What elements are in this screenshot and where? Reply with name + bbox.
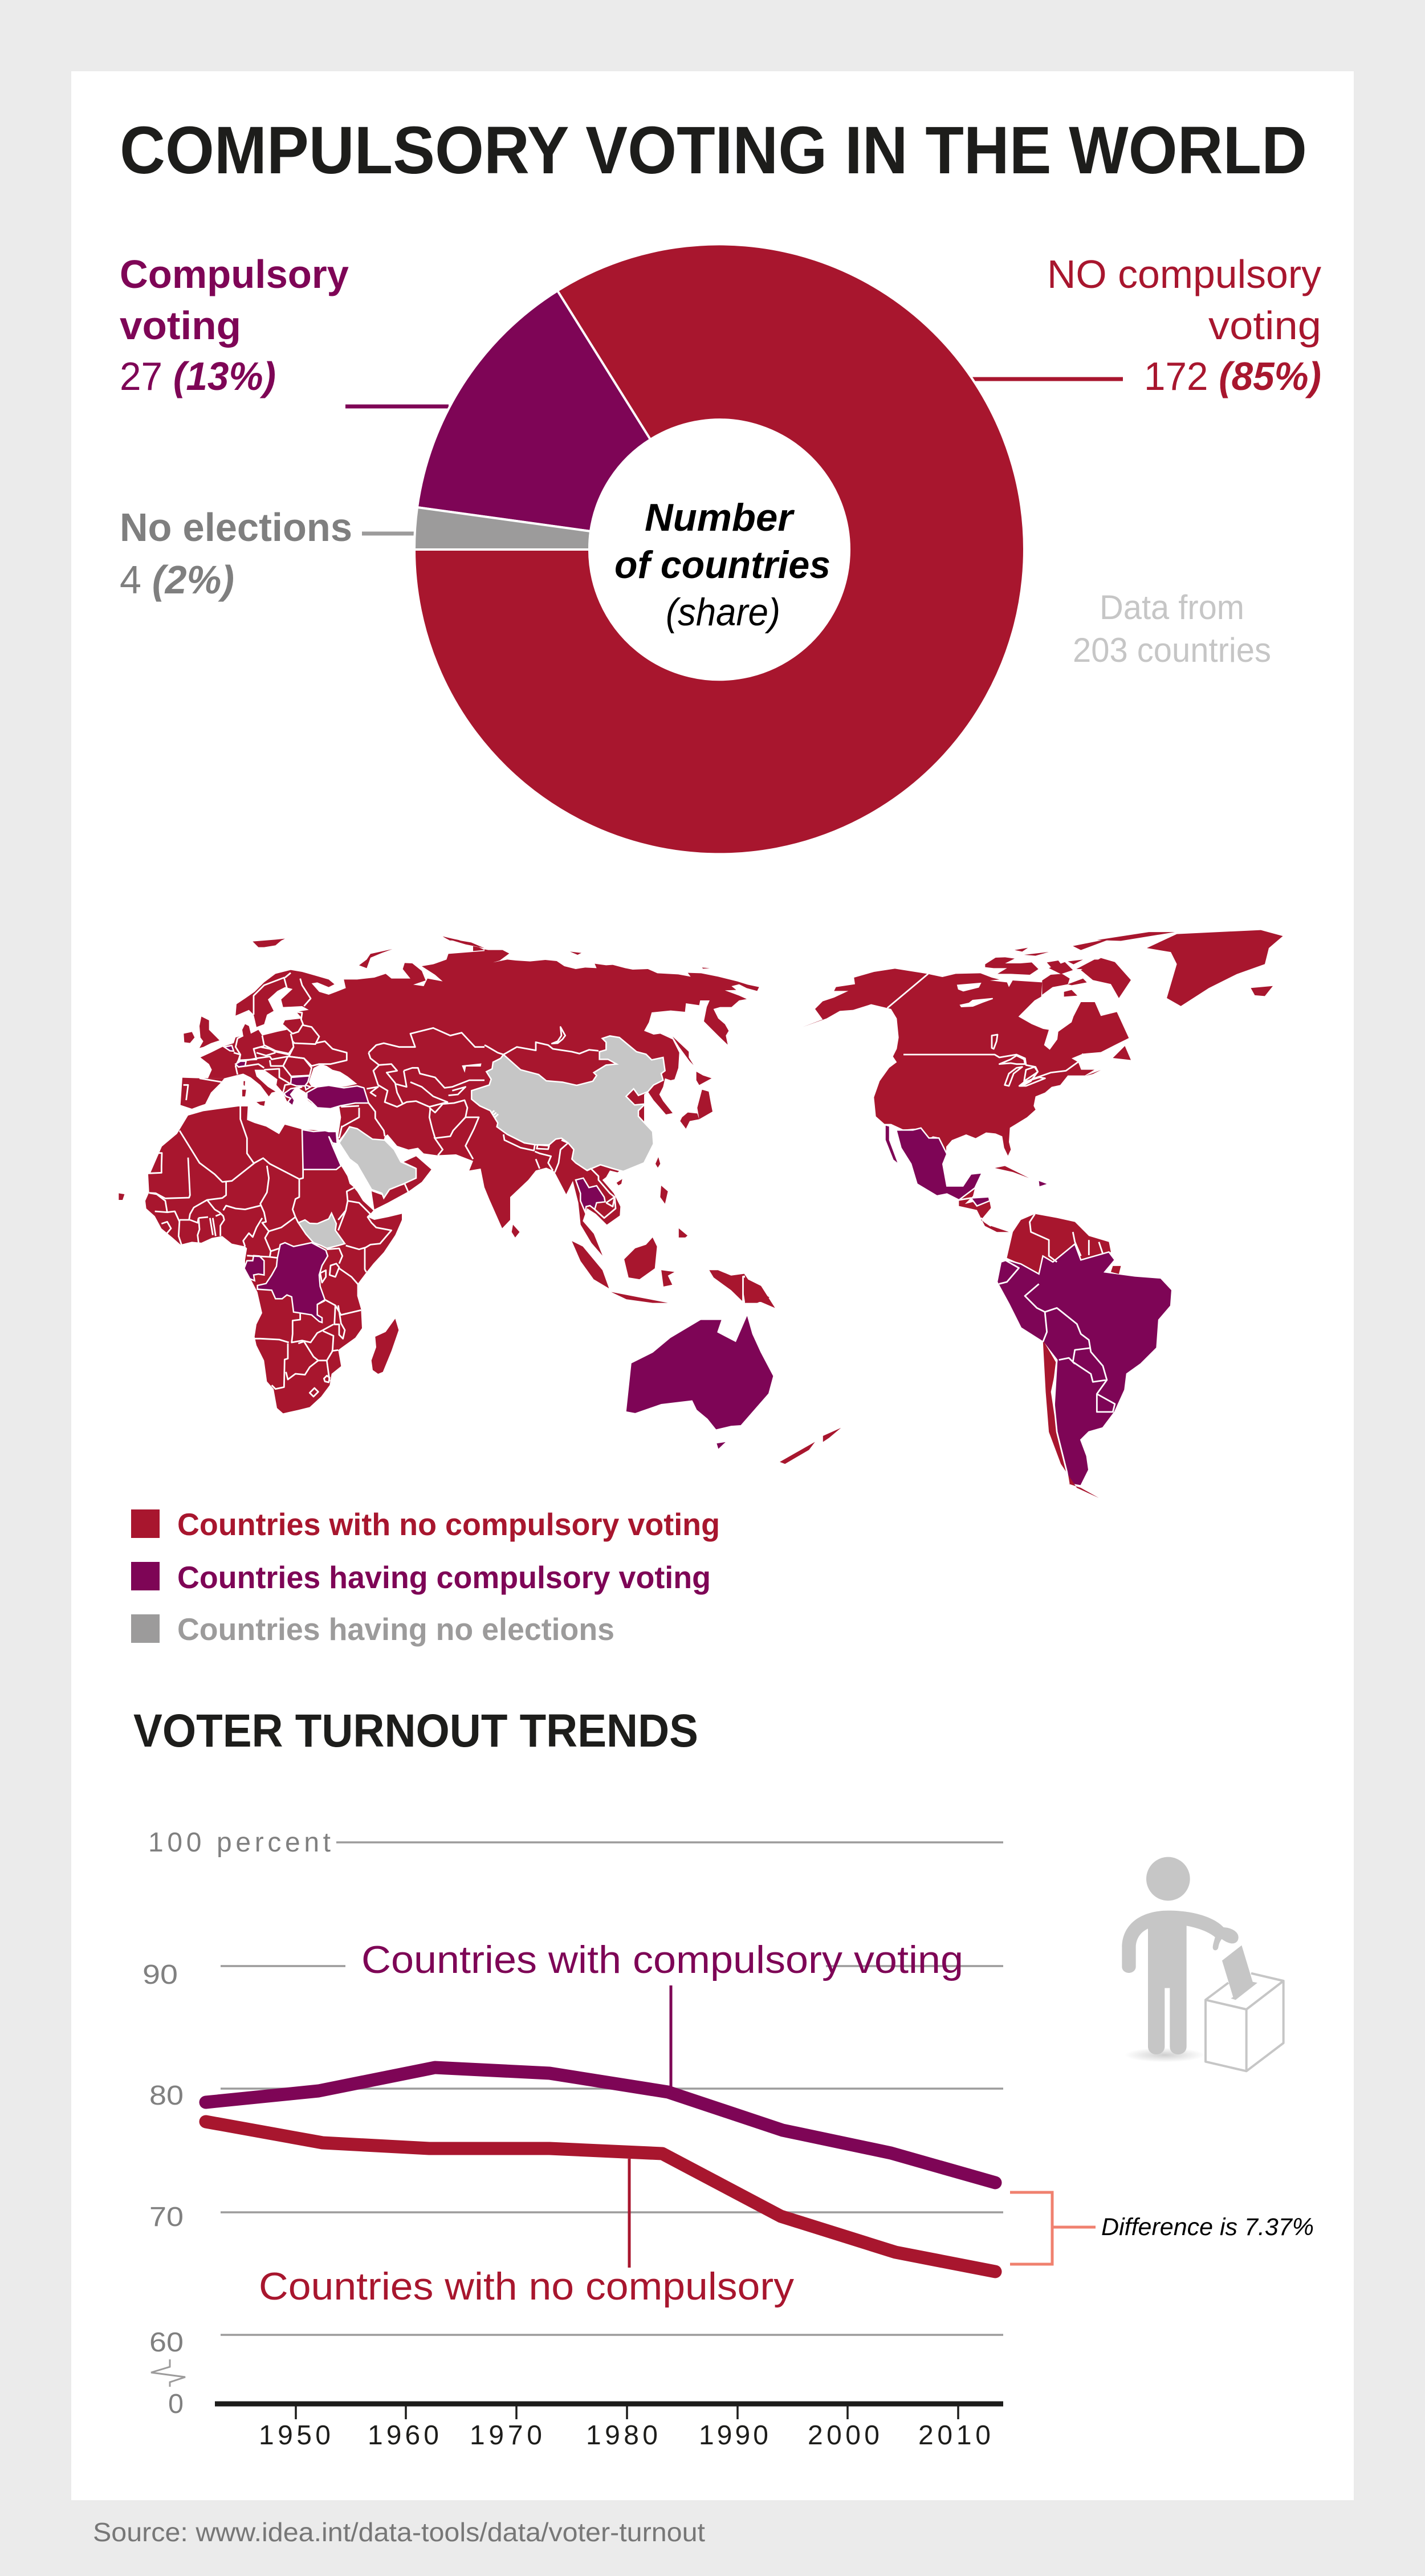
Greenland, Iceland and other islands [741,930,1283,1464]
note: data from 203 countries [1073,588,1271,669]
Australia [625,1314,774,1430]
panel: donut chart [120,244,1321,854]
African borders [149,1106,392,1397]
African mainland [145,1106,402,1413]
Yemen and Oman [372,1156,431,1210]
South Sudan [298,1213,345,1248]
x axis labels: 1960 [368,2420,439,2451]
Costa Rica [981,1218,991,1226]
Red Sea [332,1143,373,1210]
y axis labels: 60 [149,2327,184,2358]
Lake Balkhash [463,1064,481,1071]
Madagascar [372,1318,398,1374]
east Eurasia [484,949,759,1256]
Egypt [302,1130,341,1170]
map: South-East Asia islands and Australia [443,937,774,1450]
Thailand [576,1178,605,1212]
y axis labels [142,1828,331,2419]
label: compulsory voting: 27 (13%) [120,354,276,398]
Latin America, Greenland and Oceania [741,930,1283,1498]
legend [131,1507,720,1647]
Greece [284,1087,302,1106]
grid lines [221,1842,1003,2335]
x axis labels: 1970 [470,2420,542,2451]
west Eurasia [201,951,484,1187]
DR Congo [258,1243,328,1322]
head [1146,1857,1190,1901]
series label: no compulsory: Countries with no compulsory [259,2265,794,2308]
label: no elections: No elections [120,505,352,550]
Thai peninsula [582,1221,594,1238]
Cyprus [328,1113,332,1115]
title: COMPULSORY VOTING IN THE WORLD [120,113,1307,188]
South American borders [743,1198,1115,1484]
Britain, Ireland and nearby islands [184,937,484,1106]
y axis labels: 100 percent [148,1828,331,1858]
donut centre label: of countries [614,543,830,587]
Canada and USA [803,968,1129,1155]
map: Africa [119,1106,402,1413]
South America with compulsory voting [997,1244,1172,1486]
Great Bear and Great Slave lakes [958,983,993,1007]
map: the Americas [741,930,1283,1498]
label: no elections [120,505,352,602]
difference label: Difference is 7.37% [1101,2213,1314,2241]
x axis and ticks [215,2404,1003,2419]
y axis labels: 0 [168,2389,184,2419]
donut centre label: (share) [666,591,780,634]
Arctic Canada islands [985,948,1102,996]
difference bracket [1010,2192,1096,2264]
North America [803,948,1129,1155]
label: no elections: 4 (2%) [120,557,234,602]
label: compulsory voting: voting [120,303,241,348]
source: Source: www.idea.int/data-tools/data/voter-turnout [93,2517,705,2547]
x axis labels: 2000 [808,2420,880,2451]
Honduras [971,1197,990,1206]
note: data from 203 countries: Data from [1100,588,1244,626]
East Asian islands [473,946,712,1204]
legend item: compulsory voting: Countries having compulsory voting [177,1560,711,1595]
line chart [142,1828,1314,2451]
European borders [184,973,484,1194]
line: compulsory voting [206,2068,995,2183]
label: compulsory voting [120,252,349,398]
French Guiana [1111,1266,1121,1274]
Black Sea [309,1064,357,1088]
body [1122,1911,1239,2054]
label: no compulsory voting: NO compulsory [1047,252,1321,296]
Tasmania [716,1441,728,1450]
x axis labels: 1980 [586,2420,658,2451]
map: Europe and the Middle East [181,937,484,1210]
Chile [1043,1340,1099,1498]
Asian islands [443,937,769,1303]
Bulgaria [291,1076,310,1086]
y axis labels: 80 [149,2081,184,2111]
leader lines [345,379,1123,534]
Switzerland [235,1061,246,1067]
North American borders and Great Lakes [887,974,1083,1086]
axis break mark [151,2359,185,2387]
y axis labels: 90 [142,1960,178,1990]
ballot paper [1222,1946,1257,2000]
legend item: no elections: Countries having no elections [177,1611,614,1647]
heading: voter turnout trends: VOTER TURNOUT TRENDS [133,1705,698,1757]
y axis labels: 70 [149,2202,184,2232]
x axis labels: 2010 [918,2420,991,2451]
Saudi Arabia [339,1127,416,1198]
shadow [1125,2048,1204,2062]
China [471,1036,665,1171]
x axis labels [259,2420,991,2451]
connector lines [629,1985,671,2268]
donut segment: no elections [414,507,591,550]
Central America and northern South America [959,1188,1009,1232]
ballot box [1206,1973,1284,2071]
donut segment: no compulsory voting [414,244,1024,854]
note: data from 203 countries: 203 countries [1073,631,1271,669]
Turkey [307,1085,369,1109]
Gabon [244,1256,264,1281]
donut segment: compulsory voting [417,291,650,531]
line: no compulsory voting [206,2122,995,2272]
label: no compulsory voting: voting [1208,303,1321,348]
x axis labels: 1950 [259,2420,331,2451]
Cape Verde [119,1193,124,1200]
label: no compulsory voting [1047,252,1321,398]
Iberia [181,1078,224,1109]
label: no compulsory voting: 172 (85%) [1144,354,1321,398]
Dominican Republic [1038,1180,1049,1187]
Papua border [743,1276,745,1303]
legend item: no compulsory voting: Countries with no compulsory voting [177,1507,720,1542]
series label: compulsory voting: Countries with compulsory voting [361,1938,963,1981]
Mexico [896,1128,982,1200]
world map [119,930,1283,1498]
map: East and South Asia [471,946,759,1256]
donut centre label [614,496,830,634]
donut centre label: Number [645,496,795,539]
East Asian borders [484,1027,616,1218]
x axis labels: 1990 [699,2420,768,2451]
icon: person voting at ballot box [1122,1857,1284,2071]
Belgium [224,1045,234,1051]
label: compulsory voting: Compulsory [120,252,349,296]
